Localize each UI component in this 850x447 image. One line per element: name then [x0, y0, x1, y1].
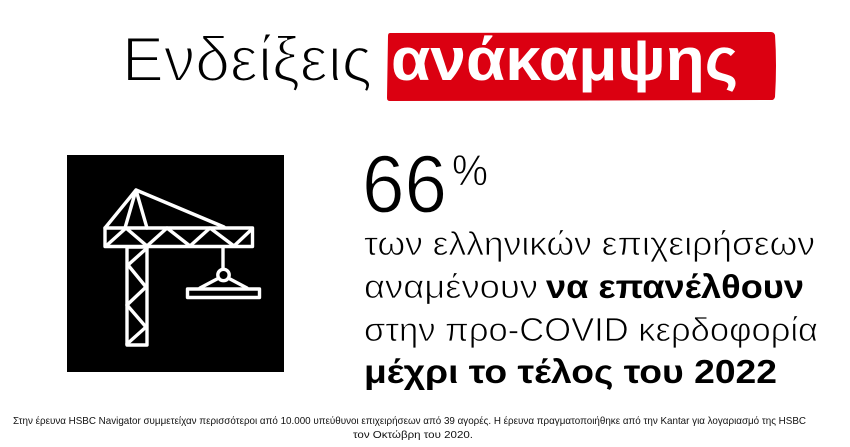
line 4: μέχρι το τέλος του 2022	[364, 353, 777, 390]
icon: crane	[105, 190, 260, 345]
line 2: να επανέλθουν	[546, 268, 804, 305]
panel: crane icon	[67, 155, 284, 372]
percent sign: %	[452, 146, 488, 195]
title: bold word: ανάκαμψης	[391, 26, 738, 93]
line 2: αναμένουν	[364, 268, 538, 305]
footnote line 2: τον Οκτώβρη του 2020.	[353, 429, 473, 441]
icon background	[67, 155, 284, 372]
line 3: στην προ-COVID κερδοφορία	[364, 311, 818, 348]
number 66: 66	[362, 139, 447, 230]
title	[122, 25, 776, 101]
footnote	[13, 415, 806, 441]
footnote line 1: Στην έρευνα HSBC Navigator συμμετείχαν περισσότεροι από 10.000 υπεύθυνοι επιχειρήσεων από 39 αγορές. Η έρευνα πραγματοποιήθηκε από την Kantar για λογαριασμό της HSBC	[13, 415, 806, 427]
line 1: των ελληνικών επιχειρήσεων	[364, 225, 815, 262]
title: light word: Ενδείξεις	[122, 25, 372, 95]
statistic	[362, 139, 488, 230]
title: red highlight box	[387, 32, 776, 101]
text block: description	[364, 225, 818, 390]
